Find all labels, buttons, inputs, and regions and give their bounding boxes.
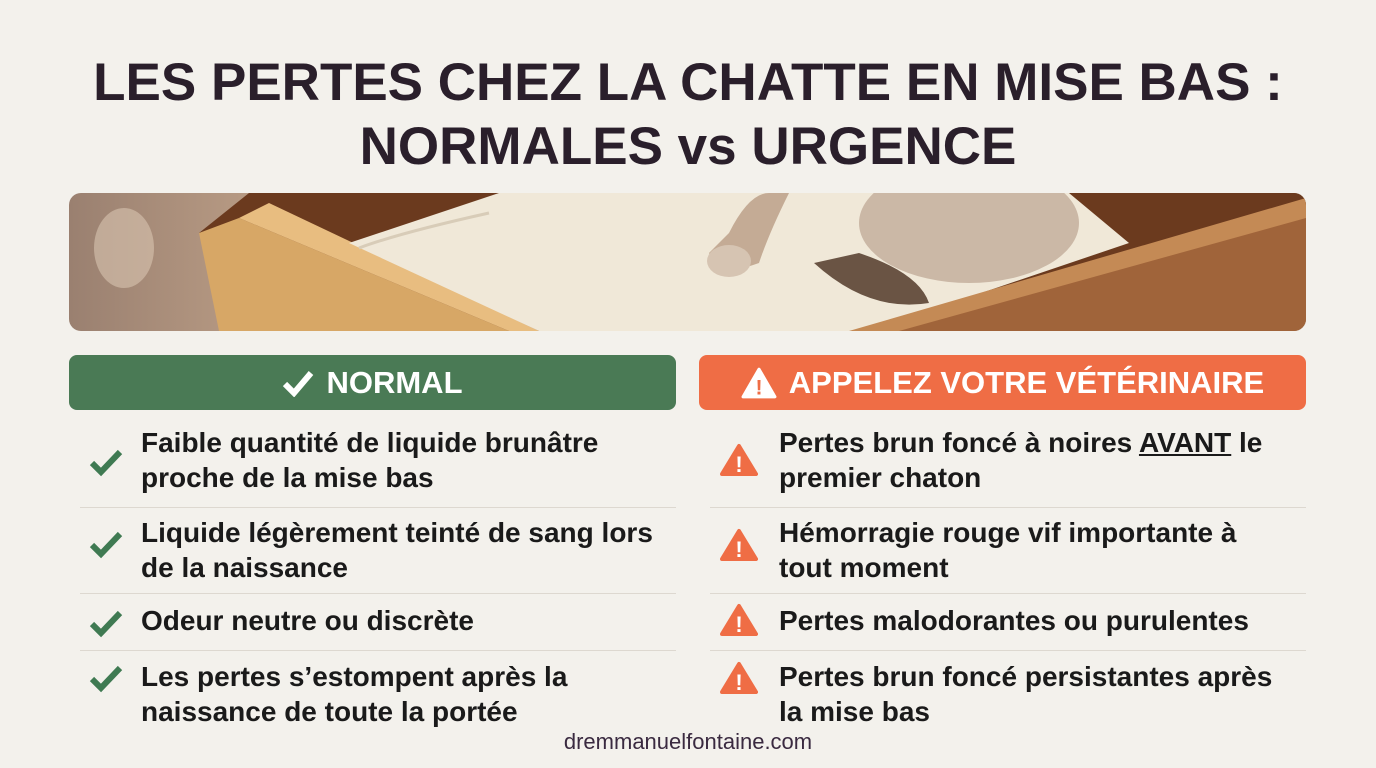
title: LES PERTES CHEZ LA CHATTE EN MISE BAS : — [93, 53, 1283, 112]
warn 2 — [720, 517, 1236, 583]
warn 4 — [720, 661, 1272, 727]
warn 3 — [720, 604, 1249, 637]
urgence list: ! — [735, 537, 743, 562]
urgence list: Pertes brun foncé à noires AVANT le — [779, 427, 1262, 458]
urgence list — [720, 427, 1272, 727]
urgence list: la mise bas — [779, 696, 930, 727]
header: appelez votre vétérinaire: APPELEZ VOTRE VÉTÉRINAIRE — [789, 364, 1264, 400]
urgence list: tout moment — [779, 552, 949, 583]
normal list: Odeur neutre ou discrète — [141, 605, 474, 636]
item 1 — [90, 427, 598, 493]
urgence list: Pertes brun foncé persistantes après — [779, 661, 1272, 692]
item 4 — [90, 661, 568, 727]
urgence list: ! — [735, 612, 743, 637]
header: normal — [69, 355, 676, 410]
warn 1 — [720, 427, 1262, 493]
item 3 — [90, 605, 474, 638]
normal list — [90, 427, 653, 727]
urgence list: premier chaton — [779, 462, 981, 493]
normal list: proche de la mise bas — [141, 462, 434, 493]
title — [93, 53, 1283, 176]
normal list: de la naissance — [141, 552, 348, 583]
urgence list: ! — [735, 452, 743, 477]
normal list: Liquide légèrement teinté de sang lors — [141, 517, 653, 548]
item 2 — [90, 517, 653, 583]
banner illustration — [69, 193, 1306, 331]
normal list: Faible quantité de liquide brunâtre — [141, 427, 598, 458]
normal list: Les pertes s’estompent après la — [141, 661, 567, 692]
urgence list: Hémorragie rouge vif importante à — [779, 517, 1236, 548]
urgence list: Pertes malodorantes ou purulentes — [779, 605, 1249, 636]
header: appelez votre vétérinaire: ! — [755, 376, 762, 398]
header: appelez votre vétérinaire — [699, 355, 1306, 410]
title: NORMALES vs URGENCE — [360, 117, 1016, 176]
normal list: naissance de toute la portée — [141, 696, 518, 727]
header: normal: NORMAL — [326, 364, 463, 400]
urgence list: ! — [735, 670, 743, 695]
footer url: dremmanuelfontaine.com — [564, 729, 812, 754]
